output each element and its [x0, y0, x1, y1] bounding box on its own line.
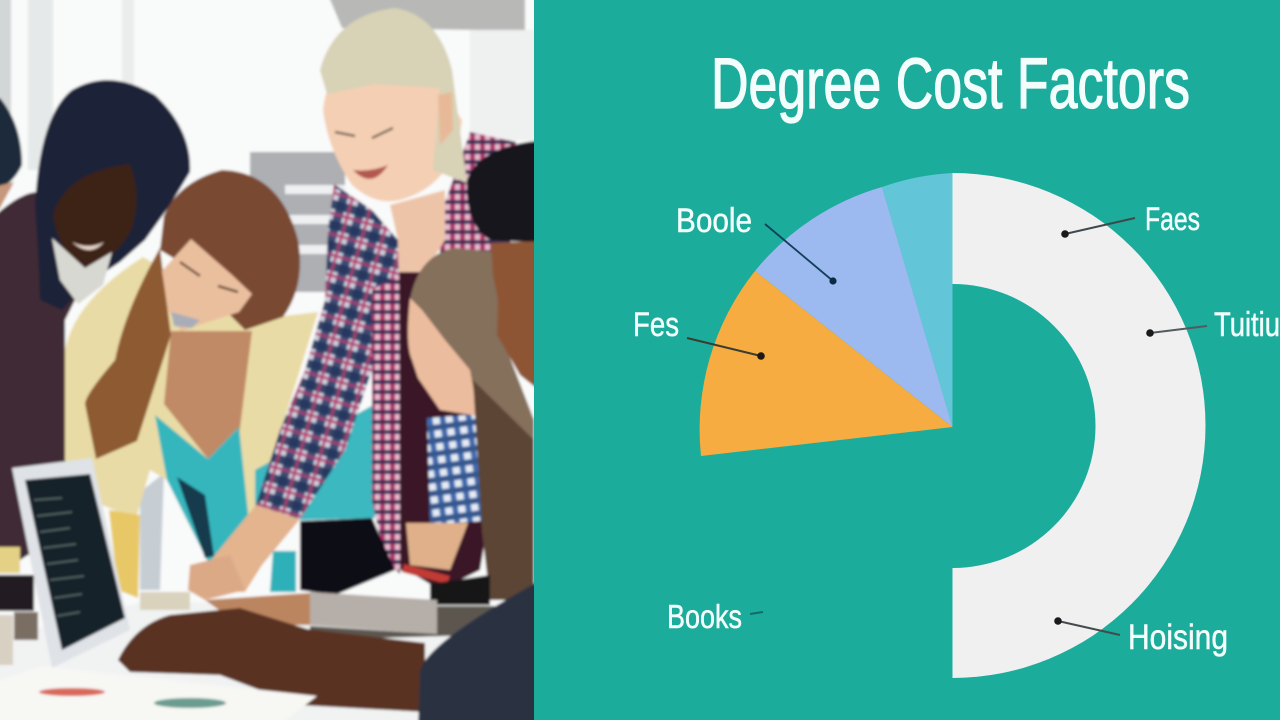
- callout: Boole: [676, 202, 837, 285]
- person: young woman with brown hair: [408, 248, 534, 605]
- table and papers: [0, 547, 544, 720]
- person: blonde woman in plaid shirt: [190, 8, 516, 595]
- callout: Housing: Hoising: [1128, 618, 1228, 657]
- photo: students around a laptop: [0, 0, 545, 720]
- callout: Fes: Fes: [633, 306, 679, 344]
- person: far-left student: [0, 98, 22, 212]
- callout: Faes: [1061, 201, 1200, 238]
- callout: Boole: Boole: [676, 202, 752, 240]
- callout: Tuitiu: [1146, 306, 1280, 344]
- segment: housing and tuition ring: [952, 173, 1206, 678]
- teal background panel: [534, 0, 1280, 720]
- person: man at right edge: [465, 140, 534, 388]
- segment: light blue slice: [882, 173, 952, 427]
- callout: Housing: [1054, 617, 1228, 657]
- segment: periwinkle slice: [755, 187, 952, 427]
- hands: [188, 555, 310, 625]
- segment: orange slice: [700, 271, 952, 456]
- photo background: bright room: [0, 0, 534, 634]
- man's arm and sleeve: [118, 578, 545, 720]
- laptop: [12, 458, 130, 668]
- notebook: [38, 686, 318, 710]
- person: woman with long brown hair: [65, 170, 375, 598]
- callout: Books: Books: [667, 598, 742, 635]
- callout: Faes: Faes: [1145, 201, 1200, 237]
- person: woman with dark hair: [0, 80, 190, 560]
- callout: Fes: [633, 306, 765, 360]
- chart: degree cost pie and ring: [700, 173, 1206, 678]
